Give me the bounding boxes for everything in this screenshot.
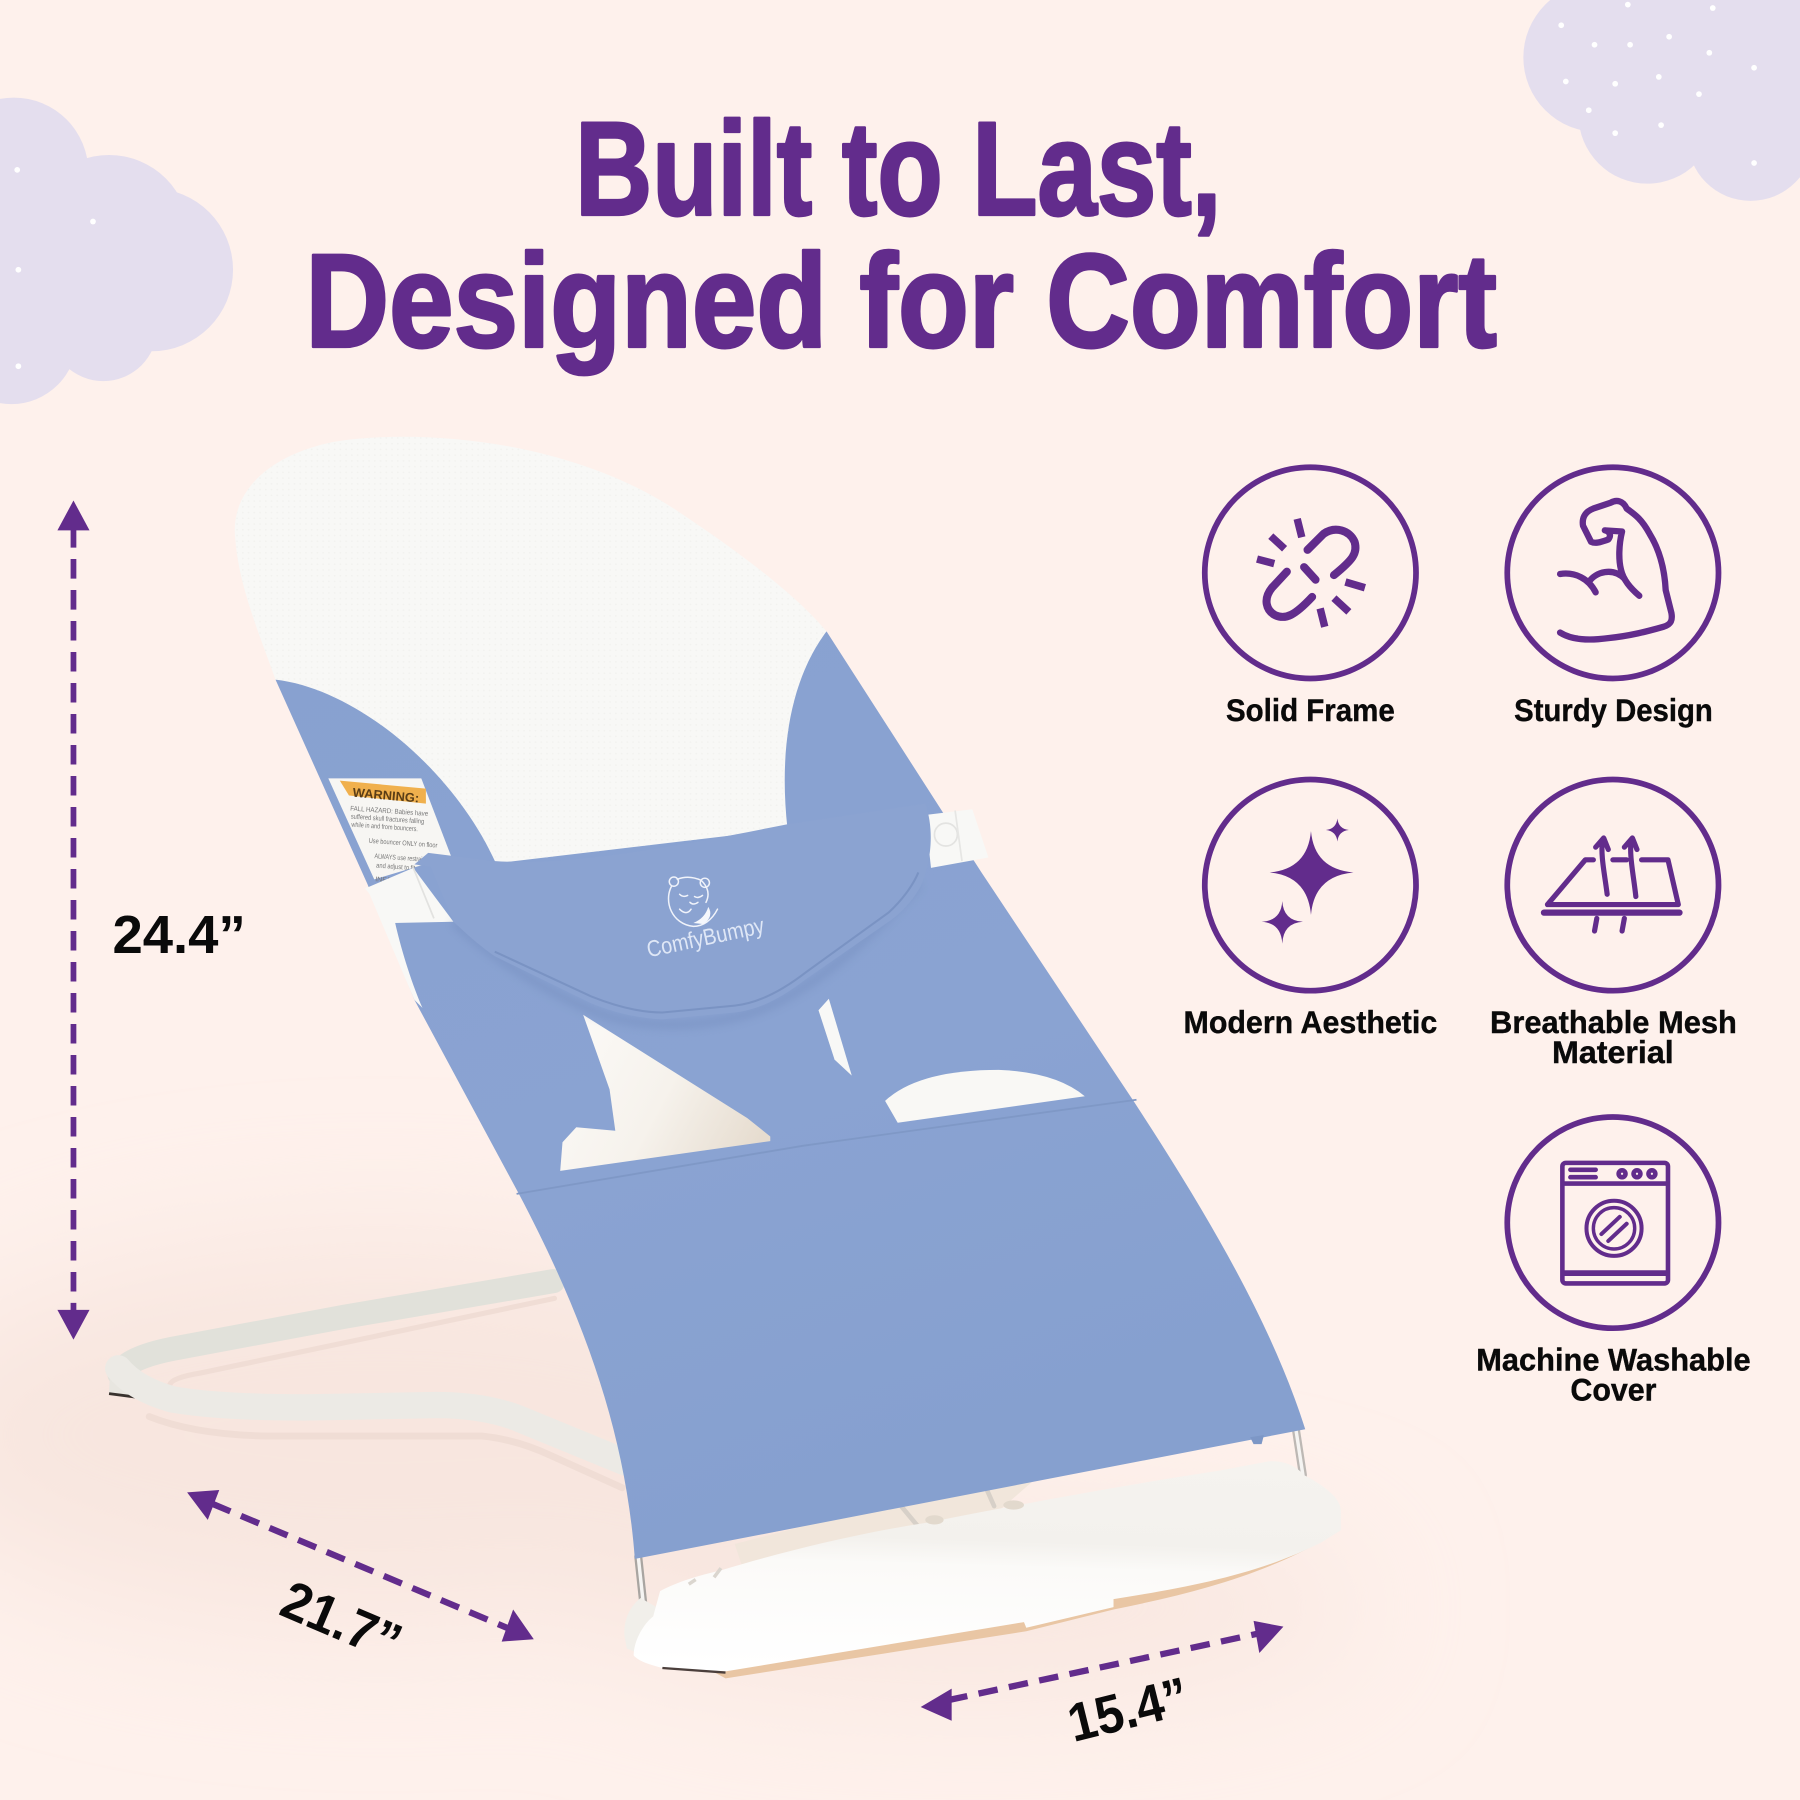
chrome rods	[638, 1430, 1303, 1621]
pillow seam	[495, 872, 918, 1012]
feature: breathable mesh	[1490, 779, 1737, 1070]
pillow	[414, 804, 931, 1019]
frame shadows	[149, 1298, 622, 1488]
pillow shadow	[453, 884, 918, 1024]
warning label: while in and from bouncers.	[350, 822, 418, 833]
label: machine washable cover: Cover	[1570, 1372, 1657, 1408]
seat tag	[1250, 1435, 1264, 1444]
label: breathable mesh material: Material	[1552, 1034, 1674, 1070]
label: 15.4 inches: 15.4”	[1062, 1666, 1194, 1754]
warning label: and adjust to fit	[376, 863, 415, 872]
arrow: width 15.4	[921, 1621, 1283, 1721]
icon: flexed arm	[1507, 467, 1718, 678]
pocket seam	[517, 1100, 1136, 1194]
label: sturdy design: Sturdy Design	[1514, 692, 1713, 728]
cloud: right	[1523, 0, 1800, 201]
bouncer product	[109, 437, 1341, 1678]
feature: solid frame	[1205, 467, 1416, 728]
arrow: depth 21.7	[187, 1490, 534, 1642]
brand logo: ComfyBumpy	[644, 912, 767, 962]
label: breathable mesh material: Breathable Mesh	[1490, 1004, 1737, 1040]
cutout: right sliver	[818, 999, 852, 1076]
feature: machine washable	[1476, 1117, 1751, 1408]
white mesh headrest	[235, 437, 827, 863]
strap: right	[925, 809, 988, 868]
warning label: FALL HAZARD: Babies have	[350, 805, 428, 818]
base side tab	[624, 1598, 657, 1653]
mesh side edge	[366, 886, 422, 1008]
warning label	[328, 778, 451, 887]
strap: left	[365, 868, 453, 923]
frame: upper tube	[119, 1281, 553, 1374]
floor shadow	[0, 1240, 1366, 1688]
warning label: WARNING:	[352, 786, 420, 805]
cutout: right mesh	[885, 1070, 1085, 1123]
crotch strap cutout: left	[560, 1015, 770, 1171]
feature: modern aesthetic	[1184, 779, 1437, 1040]
base foot	[634, 1461, 1341, 1673]
base wood strip	[700, 1538, 1327, 1678]
brand logo	[644, 877, 767, 962]
feature: sturdy design	[1507, 467, 1718, 728]
label: 24.4 inches: 24.4”	[113, 905, 246, 965]
icon: mesh with airflow	[1507, 779, 1718, 991]
arrow: height 24.4	[57, 501, 90, 1340]
warning label: INFANT	[375, 876, 401, 885]
frame: lower tube	[118, 1368, 626, 1462]
label: machine washable cover: Machine Washable	[1476, 1342, 1751, 1378]
label: 21.7 inches: 21.7”	[273, 1570, 410, 1673]
title: Designed for Comfort	[305, 227, 1497, 376]
label: breathable mesh material	[1490, 1004, 1737, 1070]
under-seat cream plastic	[735, 1481, 1033, 1578]
icon: broken link	[1205, 467, 1416, 678]
label: modern aesthetic: Modern Aesthetic	[1184, 1004, 1437, 1040]
title	[305, 95, 1497, 376]
title: Built to Last,	[575, 95, 1221, 244]
warning label: Use bouncer ONLY on floor	[368, 838, 438, 850]
cloud: left	[0, 98, 233, 404]
warning label: ALWAYS use restraints	[374, 853, 430, 864]
label: machine washable cover	[1476, 1342, 1751, 1408]
warning label: suffered skull fractures falling	[351, 814, 424, 826]
seat fabric	[276, 631, 1305, 1559]
label: solid frame: Solid Frame	[1226, 692, 1395, 728]
icon: sparkles	[1205, 779, 1416, 991]
frame: foot pad	[109, 1368, 143, 1397]
icon: washing machine	[1507, 1117, 1718, 1328]
